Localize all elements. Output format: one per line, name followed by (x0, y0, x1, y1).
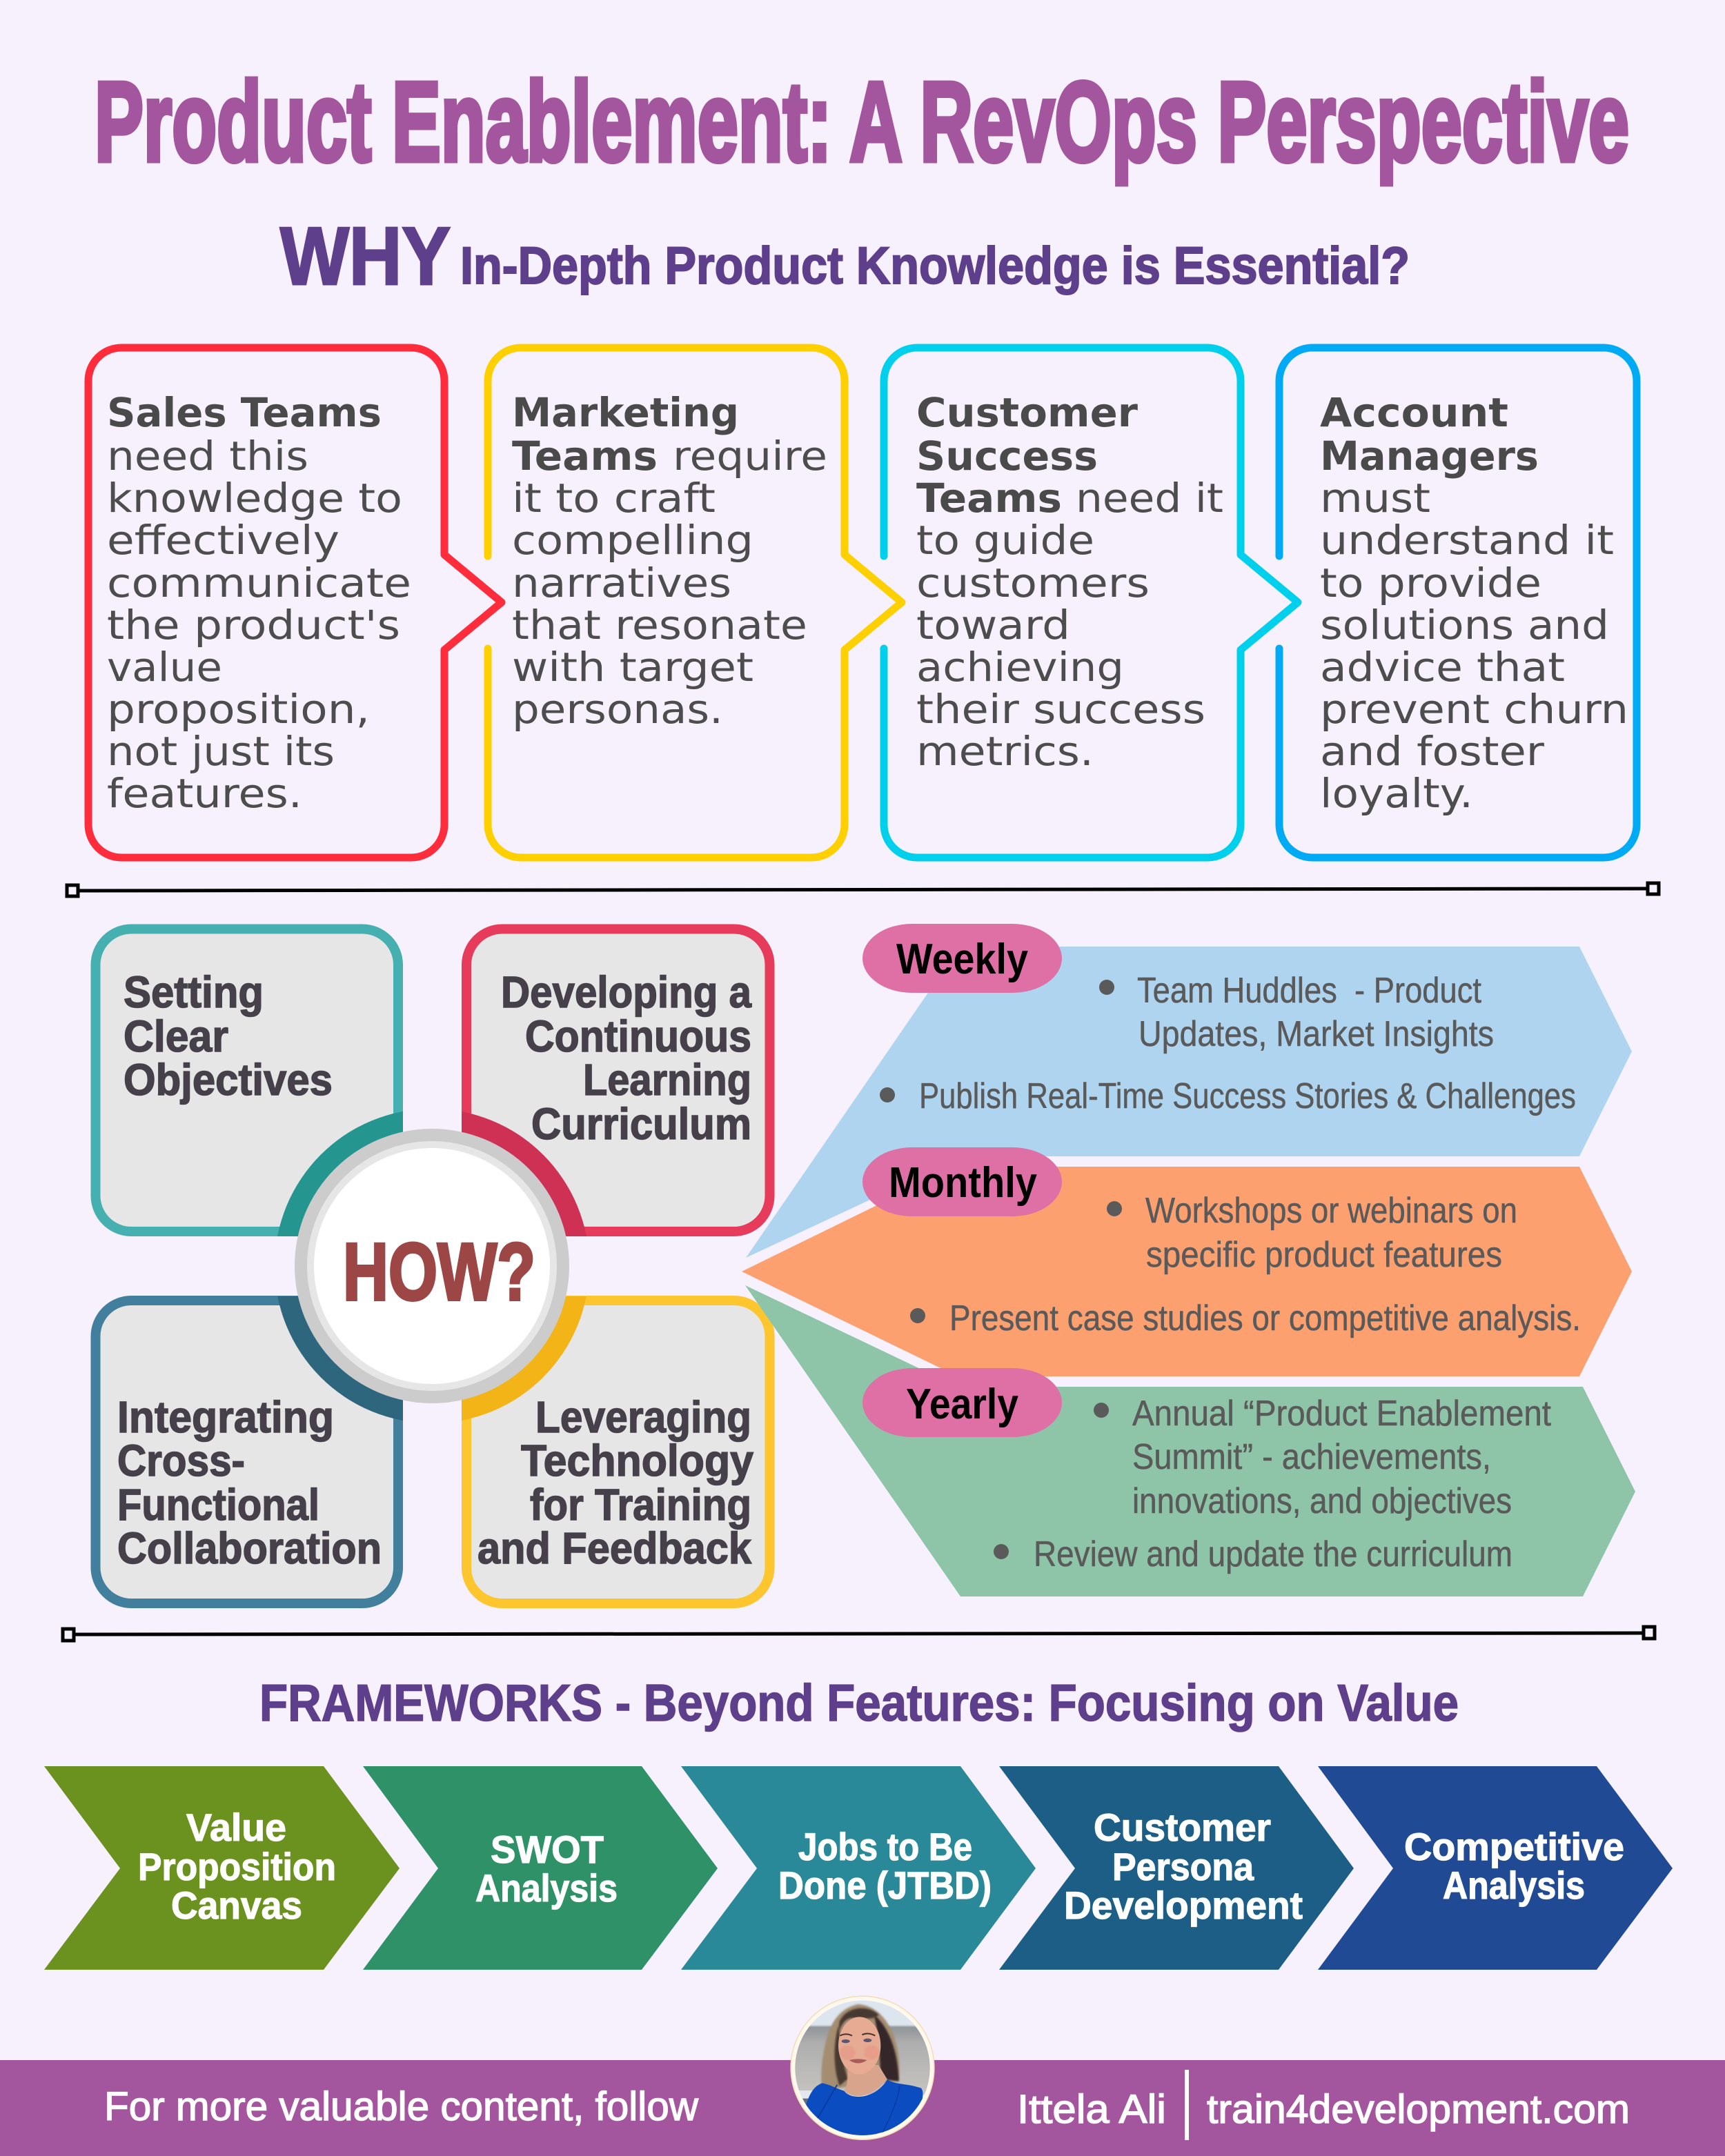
chevron: customer persona development: Customer (1094, 1806, 1271, 1849)
arrow: monthly: specific product features (1146, 1235, 1502, 1275)
footer bar (0, 2060, 1725, 2156)
panel: marketing teams: it to craft (512, 475, 716, 522)
panel: customer success teams: customers (916, 560, 1150, 606)
panel: account managers: and foster (1320, 728, 1544, 775)
panel: customer success teams: metrics. (916, 728, 1094, 775)
arrow: weekly: Publish Real-Time Success Stories & Challenges (919, 1076, 1576, 1116)
chevron: value proposition canvas: Canvas (171, 1883, 302, 1927)
card: setting clear objectives: Setting (124, 967, 264, 1017)
chevron: competitive analysis: Competitive (1404, 1825, 1624, 1868)
panel: customer success teams: Customer (916, 389, 1138, 436)
card: cross-functional collaboration (95, 1300, 398, 1603)
panel: customer success teams (884, 348, 1298, 858)
arrow: monthly: Workshops or webinars on (1145, 1191, 1517, 1231)
arrow: yearly: Summit” - achievements, (1132, 1437, 1491, 1477)
icon: author portrait (791, 1996, 934, 2139)
panel: sales teams: Sales Teams (107, 389, 382, 436)
heading: why: In-Depth Product Knowledge is Essential? (460, 237, 1410, 295)
footer bar: For more valuable content, follow (104, 2084, 699, 2129)
arrow: yearly: Annual “Product Enablement (1132, 1394, 1551, 1434)
panel: sales teams: proposition, (107, 686, 370, 733)
panel: cadence arrows (742, 924, 1635, 1596)
hub circle: HOW? (343, 1227, 535, 1318)
chevron: swot analysis: SWOT (491, 1828, 604, 1871)
panel: account managers: Account (1320, 389, 1508, 436)
card: setting clear objectives: Clear (124, 1011, 228, 1061)
chevron: value proposition canvas (44, 1766, 400, 1970)
panel: marketing teams: narratives (512, 560, 731, 606)
panel: sales teams: the product's (107, 602, 400, 649)
chevron: competitive analysis (1318, 1766, 1673, 1970)
panel: marketing teams: with target (512, 644, 753, 691)
card: technology for training and feedback: Leveraging (535, 1392, 751, 1442)
card: continuous learning curriculum: Learning (583, 1055, 751, 1105)
card: technology for training and feedback: for Training (530, 1480, 751, 1530)
panel: marketing teams: require (673, 433, 827, 479)
panel: sales teams: knowledge to (107, 475, 402, 522)
panel: customer success teams: achieving (916, 644, 1124, 691)
heading: why: WHY (280, 210, 451, 302)
card: continuous learning curriculum: Continuous (525, 1011, 751, 1061)
chevron: value proposition canvas: Value (186, 1806, 286, 1849)
panel: sales teams: features. (107, 770, 302, 817)
card: cross-functional collaboration: Integrating (117, 1392, 334, 1442)
panel: marketing teams (488, 348, 902, 858)
chevron row: frameworks (44, 1766, 1673, 1970)
panel: sales teams (88, 348, 502, 858)
chevron: jobs to be done: Done (JTBD) (778, 1863, 992, 1907)
arrow: weekly: Updates, Market Insights (1138, 1014, 1494, 1054)
chevron: jobs to be done: Jobs to Be (798, 1825, 972, 1868)
chevron: customer persona development: Persona (1112, 1845, 1254, 1888)
panel: marketing teams: compelling (512, 517, 753, 564)
chevron: swot analysis (363, 1766, 718, 1970)
card: technology for training and feedback: Technology (521, 1436, 753, 1485)
panel: account managers: prevent churn (1320, 686, 1628, 733)
card: cross-functional collaboration: Collaboration (117, 1523, 382, 1573)
panel: marketing teams: personas. (512, 686, 723, 733)
panel: marketing teams: that resonate (512, 602, 807, 649)
panel: customer success teams: their success (916, 686, 1205, 733)
pill: weekly (862, 924, 1062, 993)
arrow: yearly: innovations, and objectives (1132, 1481, 1512, 1521)
arrow: monthly (742, 1167, 1632, 1376)
card: continuous learning curriculum: Curriculum (531, 1099, 751, 1149)
arrow: monthly: Present case studies or competitive analysis. (949, 1298, 1581, 1338)
card: cross-functional collaboration: Cross- (117, 1436, 245, 1485)
chevron: value proposition canvas: Proposition (138, 1845, 336, 1888)
pill: monthly: Monthly (889, 1159, 1037, 1207)
panel: account managers: Managers (1320, 433, 1539, 479)
panel: marketing teams: Teams (512, 433, 658, 479)
panel: sales teams: not just its (107, 728, 335, 775)
pill: weekly: Weekly (896, 936, 1028, 983)
panel: account managers (1279, 348, 1637, 858)
card: setting clear objectives: Objectives (124, 1055, 333, 1105)
arrow: weekly (746, 947, 1632, 1258)
hub circle (295, 1129, 569, 1403)
chevron: customer persona development (999, 1766, 1354, 1970)
chevron: jobs to be done (681, 1766, 1036, 1970)
panel: sales teams: need this (107, 433, 308, 479)
card: continuous learning curriculum: Developing a (501, 967, 751, 1017)
card: setting clear objectives (95, 929, 398, 1232)
card: technology for training and feedback: and Feedback (477, 1523, 751, 1573)
panel: customer success teams: Success (916, 433, 1098, 479)
pill: yearly: Yearly (906, 1381, 1018, 1428)
panel: customer success teams: need it (1076, 475, 1223, 522)
panel: account managers: loyalty. (1320, 770, 1473, 817)
card: continuous learning curriculum (466, 929, 770, 1232)
panel: customer success teams: toward (916, 602, 1070, 649)
panel: sales teams: value (107, 644, 222, 691)
card: technology for training and feedback (466, 1300, 770, 1603)
pill: yearly (862, 1368, 1062, 1437)
panel: sales teams: effectively (107, 517, 339, 564)
footer bar: train4development.com (1207, 2087, 1630, 2132)
heading: why (280, 210, 1410, 302)
chevron: customer persona development: Development (1064, 1883, 1303, 1927)
panel: account managers: solutions and (1320, 602, 1609, 649)
card: cross-functional collaboration: Functional (117, 1480, 319, 1530)
arrow: yearly (745, 1285, 1635, 1596)
arrow: weekly: Team Huddles - Product (1137, 971, 1481, 1011)
heading: frameworks: FRAMEWORKS - Beyond Features: Focusing on Value (259, 1674, 1459, 1732)
panel: how diagram (95, 929, 770, 1603)
panel: customer success teams: to guide (916, 517, 1094, 564)
panel: account managers: understand it (1320, 517, 1614, 564)
panel: account managers: advice that (1320, 644, 1565, 691)
chevron: swot analysis: Analysis (475, 1866, 618, 1910)
pill: monthly (862, 1147, 1062, 1216)
arrow: yearly: Review and update the curriculum (1034, 1534, 1512, 1574)
panel: customer success teams: Teams (916, 475, 1062, 522)
footer bar: Ittela Ali (1017, 2087, 1166, 2132)
panel: sales teams: communicate (107, 560, 411, 606)
panel: account managers: must (1320, 475, 1430, 522)
panel: account managers: to provide (1320, 560, 1541, 606)
panel: marketing teams: Marketing (512, 389, 739, 436)
chevron: competitive analysis: Analysis (1443, 1863, 1585, 1907)
